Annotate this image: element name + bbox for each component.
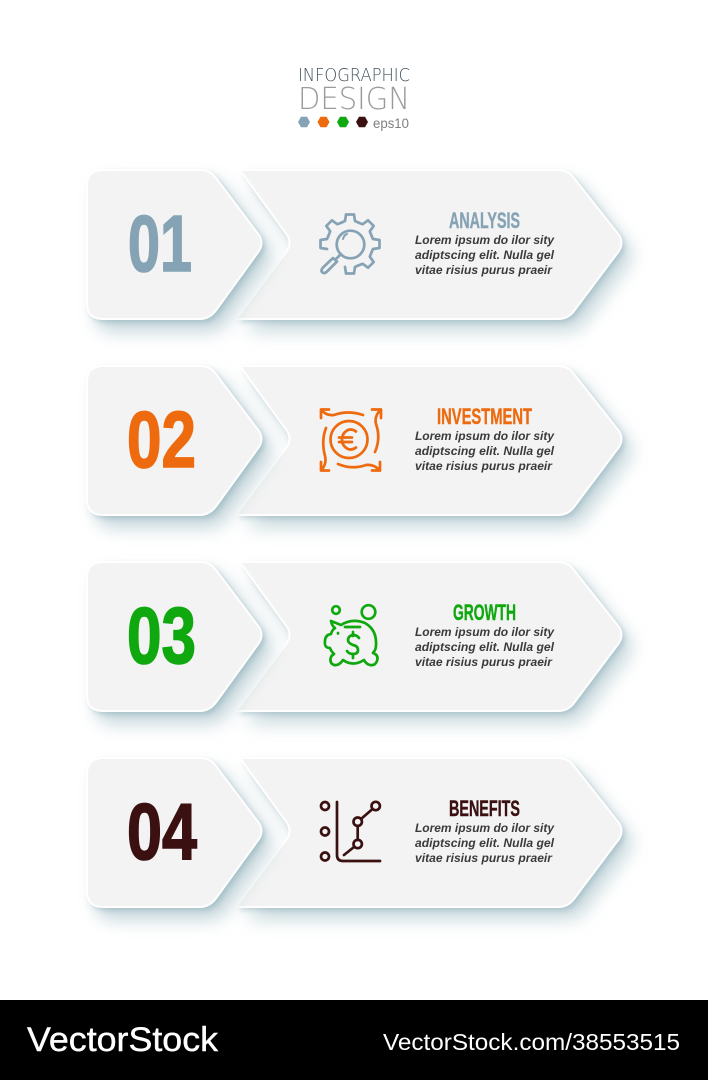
row 2: investment: [87, 366, 632, 527]
number panel 4: [87, 758, 272, 919]
body text 1: adiptscing elit. Nulla gel: [415, 248, 555, 262]
body text 4: adiptscing elit. Nulla gel: [415, 836, 555, 850]
heading: BENEFITS: BENEFITS: [449, 796, 520, 821]
number panel 2: [87, 366, 272, 527]
body text 3: Lorem ipsum do ilor sity: [415, 625, 555, 639]
body text 1: vitae risius purus praeir: [415, 263, 553, 277]
arrow panel 2: [236, 366, 632, 527]
number 01: 01: [128, 199, 192, 288]
body text 2: [415, 429, 555, 473]
icon: gear with magnifier: [320, 214, 380, 274]
body text 3: vitae risius purus praeir: [415, 655, 553, 669]
body text 2: adiptscing elit. Nulla gel: [415, 444, 555, 458]
arrow panel 1: [236, 170, 632, 331]
footer brand: VectorStock: [27, 1021, 219, 1059]
icon: euro with arrows: [321, 410, 381, 470]
heading: ANALYSIS: ANALYSIS: [449, 208, 520, 233]
icon: line chart: [321, 802, 380, 861]
footer url: VectorStock.com/38553515: [383, 1029, 680, 1055]
body text 4: [415, 821, 555, 865]
body text 4: Lorem ipsum do ilor sity: [415, 821, 555, 835]
number panel 3: [87, 562, 272, 723]
row 4: benefits: [87, 758, 632, 919]
body text 3: [415, 625, 555, 669]
header: infographic design logo: [298, 65, 410, 131]
body text 2: vitae risius purus praeir: [415, 459, 553, 473]
body text 2: Lorem ipsum do ilor sity: [415, 429, 555, 443]
heading: INVESTMENT: INVESTMENT: [437, 404, 532, 429]
logo line: INFOGRAPHIC: INFOGRAPHIC: [298, 65, 410, 86]
row 1: analysis: [87, 170, 632, 331]
number 04: 04: [127, 787, 197, 876]
row 3: growth: [87, 562, 632, 723]
number 03: 03: [127, 591, 196, 680]
footer bar: [0, 1000, 708, 1080]
body text 1: Lorem ipsum do ilor sity: [415, 233, 555, 247]
body text 3: adiptscing elit. Nulla gel: [415, 640, 555, 654]
icon: piggy bank: [325, 605, 378, 665]
body text 1: [415, 233, 555, 277]
logo line: DESIGN: DESIGN: [298, 82, 410, 117]
number 02: 02: [127, 395, 196, 484]
logo label: eps10: eps10: [373, 115, 409, 131]
logo colour dots: [298, 117, 368, 127]
body text 4: vitae risius purus praeir: [415, 851, 553, 865]
heading: GROWTH: GROWTH: [453, 600, 516, 625]
arrow panel 4: [236, 758, 632, 919]
arrow panel 3: [236, 562, 632, 723]
number panel 1: [87, 170, 272, 331]
